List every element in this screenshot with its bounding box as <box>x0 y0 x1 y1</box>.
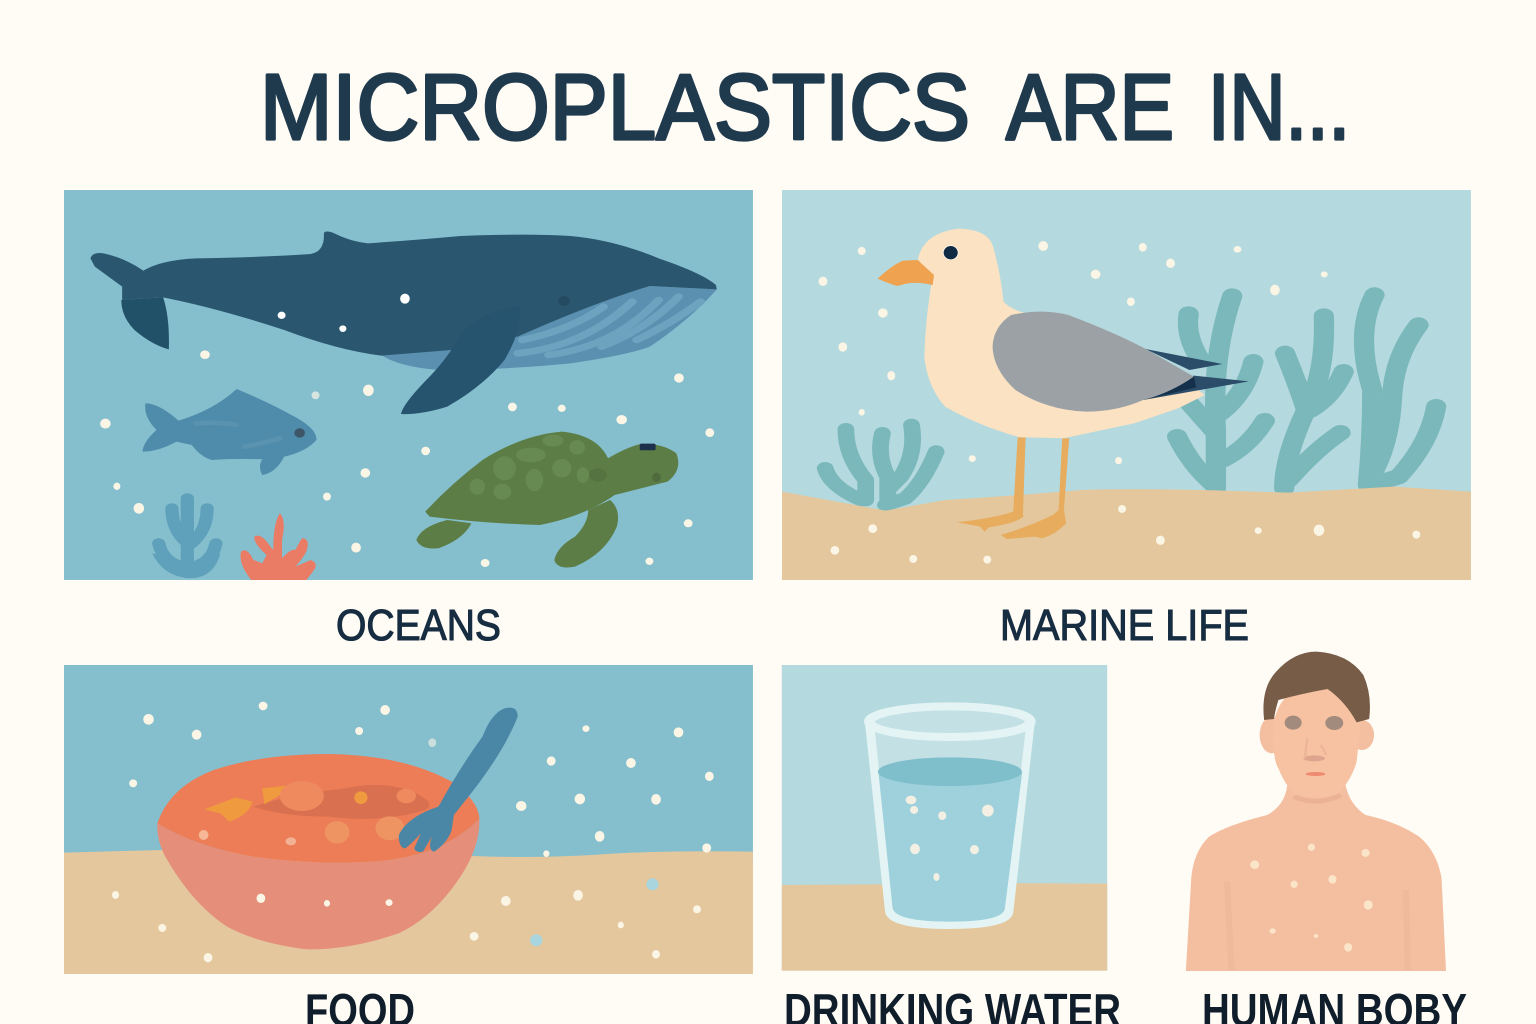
microplastic particles <box>100 350 714 567</box>
microplastic particles <box>112 702 714 962</box>
panel: food <box>64 665 753 974</box>
label: oceans: OCEANS <box>336 601 501 650</box>
label: marine life: MARINE LIFE <box>1000 601 1249 650</box>
fork <box>399 708 518 852</box>
title: ARE <box>1006 55 1174 159</box>
table <box>64 850 753 974</box>
human figure <box>1186 652 1446 971</box>
seagull <box>878 229 1249 539</box>
coral: red <box>240 513 316 580</box>
glass of water <box>865 706 1035 929</box>
coral: blue <box>152 498 220 578</box>
title: IN... <box>1208 55 1350 159</box>
title <box>260 55 1350 159</box>
turtle <box>416 432 678 567</box>
panel: marine life <box>782 190 1471 580</box>
bowl <box>157 754 479 949</box>
title: MICROPLASTICS <box>260 55 970 159</box>
panel: drinking water <box>782 665 1107 971</box>
whale <box>90 231 717 414</box>
sand <box>782 487 1471 580</box>
table <box>782 883 1107 971</box>
panel: oceans <box>64 190 753 580</box>
seaweed <box>825 295 1436 505</box>
fish <box>142 389 316 475</box>
microplastic particles <box>819 241 1420 564</box>
